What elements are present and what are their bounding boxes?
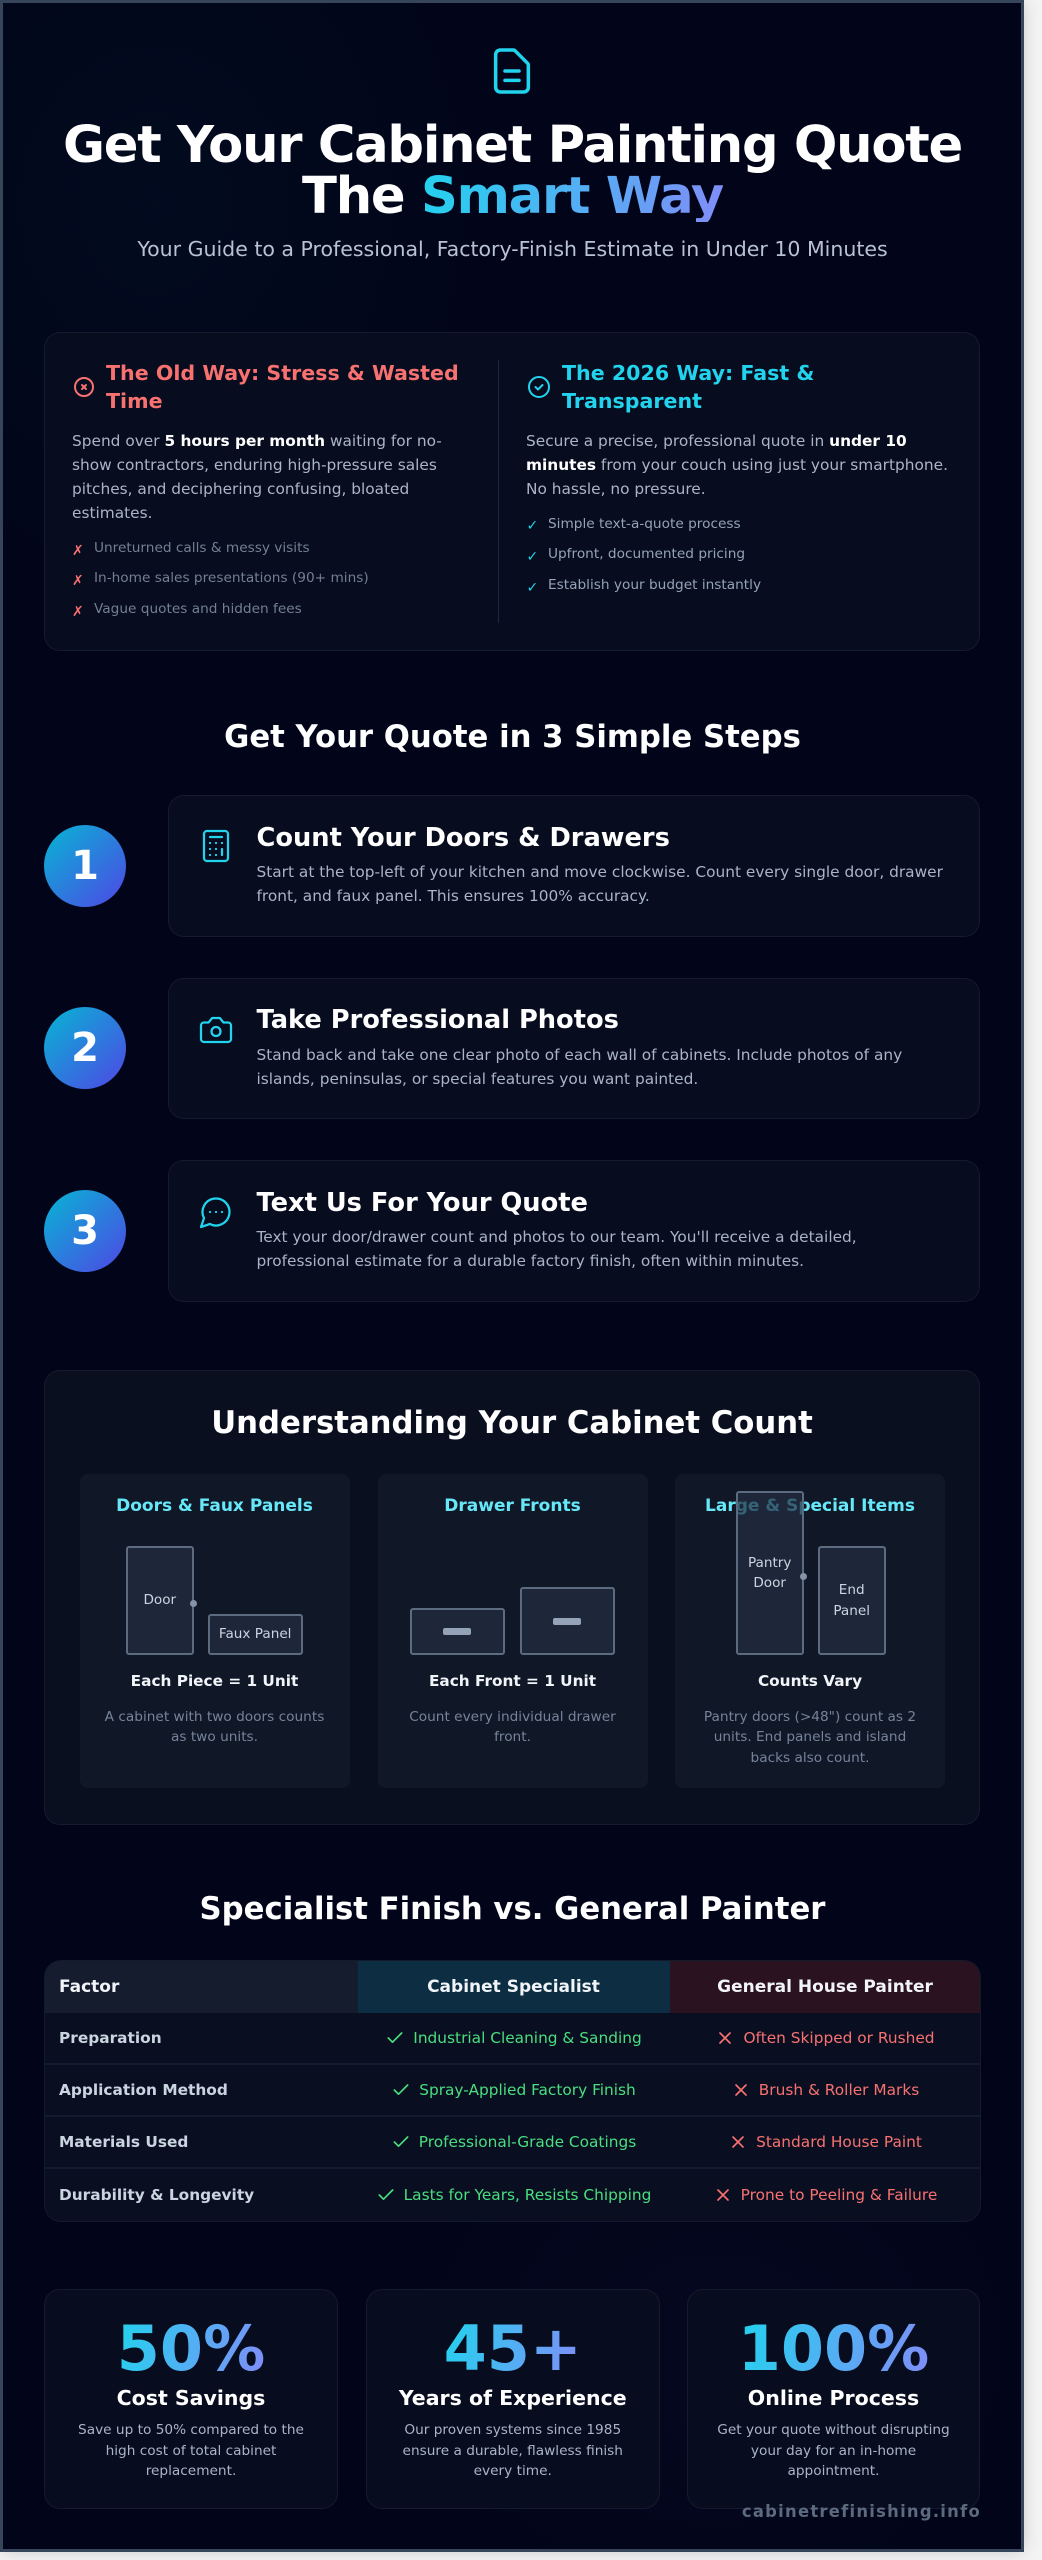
- step text 1: Start at the top-left of your kitchen and move clockwise. Count every single door, drawer: [256, 863, 943, 881]
- step number 2: 2: [71, 1025, 99, 1071]
- card text: units. End panels and island: [714, 1729, 906, 1745]
- old way list: Vague quotes and hidden fees: [94, 601, 302, 617]
- row: preparation: Preparation: [59, 2029, 162, 2047]
- old way heading: The Old Way: Stress & Wasted: [106, 361, 459, 385]
- stat card: experience: [366, 2289, 660, 2509]
- step title 3: Text Us For Your Quote: [256, 1188, 588, 1218]
- stat number: 100%: [738, 2312, 929, 2384]
- stat card: online process: [687, 2289, 980, 2509]
- step title 2: Take Professional Photos: [256, 1005, 619, 1035]
- icon: camera: [200, 1016, 232, 1044]
- unit rule: Counts Vary: [758, 1672, 862, 1690]
- card text: backs also count.: [751, 1750, 869, 1766]
- row: durability: Durability & Longevity: [59, 2186, 254, 2204]
- row: durability: Lasts for Years, Resists Chipping: [404, 2186, 651, 2204]
- stat number: 45+: [444, 2312, 582, 2384]
- 2026 way heading: The 2026 Way: Fast &: [562, 361, 814, 385]
- diagram: faux panel: [208, 1614, 303, 1655]
- old way list: ✗: [72, 542, 84, 558]
- old way text: show contractors, enduring high-pressure sales: [72, 456, 437, 474]
- old way list: Unreturned calls & messy visits: [94, 540, 310, 556]
- 2026 way list: ✓: [526, 549, 538, 565]
- step text 3: [256, 1228, 857, 1270]
- stat text: Save up to 50% compared to the: [78, 2422, 304, 2438]
- row: materials used: Materials Used: [59, 2133, 188, 2151]
- diagram: door: Door: [143, 1592, 176, 1608]
- diagram: faux panel: Faux Panel: [219, 1626, 291, 1642]
- 2026 way text: No hassle, no pressure.: [526, 480, 706, 498]
- diagram: tall drawer: [520, 1587, 614, 1655]
- step text 3: Text your door/drawer count and photos to our team. You'll receive a detailed,: [256, 1228, 857, 1246]
- row: durability: [44, 2167, 980, 2220]
- step text 2: islands, peninsulas, or special features you want painted.: [256, 1070, 698, 1088]
- 2026 way text: minutes from your couch using just your smartphone.: [526, 456, 948, 474]
- card title: Drawer Fronts: [444, 1496, 581, 1516]
- diagram: pantry door: [736, 1491, 804, 1655]
- stat text: [403, 2422, 623, 2479]
- diagram: pantry door: Door: [753, 1575, 786, 1591]
- title: The: [302, 166, 404, 226]
- old way heading: [106, 361, 459, 412]
- stat text: ensure a durable, flawless finish: [403, 2443, 623, 2459]
- stat text: high cost of total cabinet: [106, 2443, 276, 2459]
- old way text: [72, 432, 442, 522]
- table header: General House Painter: [717, 1977, 933, 1997]
- diagram: end panel: Panel: [833, 1602, 870, 1618]
- diagram: end panel: [818, 1546, 886, 1655]
- 2026 way list: ✓: [526, 518, 538, 534]
- 2026 way heading: Transparent: [562, 388, 702, 412]
- card title: Doors & Faux Panels: [116, 1496, 313, 1516]
- diagram: pantry door: Pantry: [748, 1555, 791, 1571]
- row: application method: Brush & Roller Marks: [759, 2081, 919, 2099]
- card text: A cabinet with two doors counts: [105, 1709, 324, 1725]
- subtitle: Your Guide to a Professional, Factory-Finish Estimate in Under 10 Minutes: [137, 237, 888, 261]
- stat card: cost savings: [44, 2289, 338, 2509]
- step 1: [44, 795, 980, 937]
- row: application method: [44, 2063, 980, 2115]
- stat number: 50%: [117, 2312, 265, 2384]
- watermark: cabinetrefinishing.info: [742, 2502, 981, 2520]
- table header: [45, 1961, 980, 2013]
- step 2: [44, 978, 980, 1119]
- 2026 way heading: [562, 361, 814, 412]
- 2026 way text: Secure a precise, professional quote in under 10: [526, 432, 907, 450]
- heading: cabinet count: Understanding Your Cabinet Count: [211, 1405, 813, 1441]
- step card 2: [168, 978, 980, 1119]
- 2026 way list: Upfront, documented pricing: [548, 546, 745, 562]
- icon: calculator: [202, 830, 230, 862]
- card title: Large & Special Items: [705, 1496, 915, 1516]
- row: durability: Prone to Peeling & Failure: [741, 2186, 937, 2204]
- title: Get Your Cabinet Painting Quote: [63, 115, 962, 175]
- step text 1: front, and faux panel. This ensures 100% accuracy.: [256, 887, 650, 905]
- row: preparation: Industrial Cleaning & Sanding: [413, 2029, 642, 2047]
- panel: cabinet count: [44, 1370, 980, 1825]
- step number 2: [44, 1007, 126, 1089]
- card text: front.: [494, 1729, 531, 1745]
- step text 2: [256, 1046, 902, 1088]
- step number 1: [44, 824, 126, 906]
- old way text: estimates.: [72, 504, 152, 522]
- heading: comparison: Specialist Finish vs. General Painter: [200, 1891, 825, 1927]
- row: preparation: [44, 2013, 980, 2063]
- unit rule: Each Piece = 1 Unit: [131, 1672, 298, 1690]
- 2026 way list: ✓: [526, 580, 538, 596]
- heading: steps: Get Your Quote in 3 Simple Steps: [224, 719, 801, 755]
- card text: [104, 1709, 324, 1745]
- 2026 way text: [526, 432, 948, 498]
- row: materials used: Standard House Paint: [756, 2133, 922, 2151]
- unit rule: Each Front = 1 Unit: [429, 1672, 596, 1690]
- stat text: [717, 2422, 950, 2479]
- comparison table: [44, 1960, 980, 2220]
- card text: [409, 1709, 616, 1745]
- row: application method: Application Method: [59, 2081, 228, 2099]
- card: doors and faux panels: [80, 1474, 350, 1788]
- card: large and special items: [675, 1474, 945, 1788]
- stat text: your day for an in-home: [751, 2443, 916, 2459]
- old way text: Spend over 5 hours per month waiting for no-: [72, 432, 442, 450]
- row: application method: Spray-Applied Factory Finish: [419, 2081, 636, 2099]
- step card 1: [168, 795, 980, 936]
- diagram: end panel: End: [839, 1582, 865, 1598]
- step text 3: professional estimate for a durable factory finish, often within minutes.: [256, 1252, 804, 1270]
- stat text: replacement.: [146, 2463, 236, 2479]
- 2026 way list: [526, 516, 761, 596]
- panel: old way vs 2026 way: [44, 332, 980, 651]
- old way list: [72, 540, 369, 620]
- title: Smart Way: [421, 166, 723, 226]
- stat label: Cost Savings: [117, 2386, 265, 2410]
- stat text: appointment.: [787, 2463, 880, 2479]
- old way heading: Time: [106, 388, 163, 412]
- row: materials used: Professional-Grade Coatings: [419, 2133, 636, 2151]
- title: [63, 115, 962, 226]
- stat label: Years of Experience: [399, 2386, 627, 2410]
- old way list: In-home sales presentations (90+ mins): [94, 570, 369, 586]
- old way list: ✗: [72, 573, 84, 589]
- stat text: Get your quote without disrupting: [717, 2422, 950, 2438]
- card: drawer fronts: [378, 1474, 648, 1788]
- old way text: pitches, and deciphering confusing, bloated: [72, 480, 409, 498]
- stat text: every time.: [474, 2463, 552, 2479]
- icon: document: [494, 48, 530, 94]
- step text 1: [256, 863, 943, 905]
- row: materials used: [44, 2115, 980, 2167]
- step number 3: 3: [71, 1208, 99, 1254]
- row: preparation: Often Skipped or Rushed: [743, 2029, 935, 2047]
- stat text: Our proven systems since 1985: [404, 2422, 621, 2438]
- diagram: short drawer: [410, 1608, 505, 1655]
- table header: Factor: [59, 1977, 119, 1997]
- icon: check circle: [528, 376, 550, 398]
- card text: [704, 1709, 916, 1766]
- stat text: [78, 2422, 304, 2479]
- 2026 way list: Simple text-a-quote process: [548, 516, 741, 532]
- step number 1: 1: [71, 842, 99, 888]
- step title 1: Count Your Doors & Drawers: [256, 823, 670, 853]
- step number 3: [44, 1190, 126, 1272]
- icon: message: [200, 1197, 231, 1228]
- old way list: ✗: [72, 604, 84, 620]
- step text 2: Stand back and take one clear photo of each wall of cabinets. Include photos of any: [256, 1046, 902, 1064]
- stat label: Online Process: [748, 2386, 919, 2410]
- diagram: door: [126, 1546, 194, 1655]
- card text: as two units.: [171, 1729, 258, 1745]
- card text: Pantry doors (>48") count as 2: [704, 1709, 916, 1725]
- table header: Cabinet Specialist: [427, 1977, 600, 1997]
- card text: Count every individual drawer: [409, 1709, 616, 1725]
- step 3: [44, 1160, 980, 1302]
- icon: x circle: [74, 377, 94, 397]
- 2026 way list: Establish your budget instantly: [548, 577, 761, 593]
- step card 3: [168, 1160, 980, 1302]
